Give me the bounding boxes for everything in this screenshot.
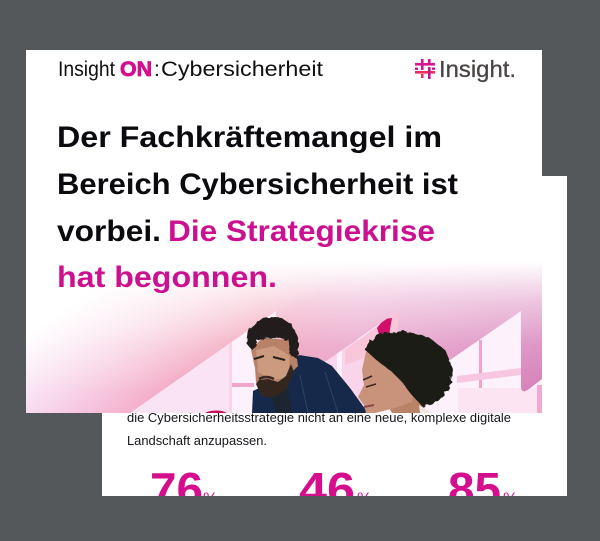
photo background: office windows <box>130 305 542 418</box>
woman hair <box>365 331 453 407</box>
logo: Insight: Insight. <box>439 56 516 82</box>
body text <box>127 411 511 448</box>
stat: 85 percent: % <box>503 489 518 508</box>
body text: Landschaft anzupassen. <box>127 434 267 448</box>
heading: Der Fachkräftemangel im <box>57 121 442 154</box>
stat: 85 percent <box>450 472 515 496</box>
statistics row <box>152 472 515 496</box>
logo: Insight <box>415 59 514 82</box>
photo: woman <box>358 331 453 413</box>
stat: 46 percent <box>300 472 369 496</box>
icon: Insight mark <box>415 59 435 79</box>
stat: 76 percent: % <box>203 489 218 508</box>
woman face <box>358 350 414 413</box>
man jacket <box>252 355 368 413</box>
body text: die Cybersicherheitsstrategie nicht an eine neue, komplexe digitale <box>127 411 511 425</box>
heading: Bereich Cybersicherheit ist <box>57 168 458 201</box>
stat: 76 percent <box>152 472 215 496</box>
woman neck and shirt <box>390 396 424 413</box>
man eyes <box>254 356 285 360</box>
panel: front cover <box>26 50 542 418</box>
panel: back page <box>102 176 567 515</box>
heading: hat begonnen. <box>57 261 277 294</box>
heading <box>57 121 458 294</box>
heading: vorbei. <box>57 215 161 248</box>
heading: Die Strategiekrise <box>168 215 435 248</box>
header title <box>60 60 323 80</box>
man hair <box>246 316 299 358</box>
photo: man <box>246 316 368 413</box>
man face <box>251 338 298 397</box>
header title: : <box>154 58 160 81</box>
infographic page <box>26 50 567 496</box>
stat: 85 percent: 85 <box>448 463 501 515</box>
stat: 46 percent: 46 <box>299 463 355 515</box>
header title: Cybersicherheit <box>161 58 323 81</box>
stat: 76 percent: 76 <box>150 463 203 515</box>
header title: ON <box>120 58 152 81</box>
man beard <box>256 364 294 398</box>
gradient chevron overlay <box>26 262 542 413</box>
header title: Insight <box>58 58 115 81</box>
stat: 46 percent: % <box>357 489 372 508</box>
